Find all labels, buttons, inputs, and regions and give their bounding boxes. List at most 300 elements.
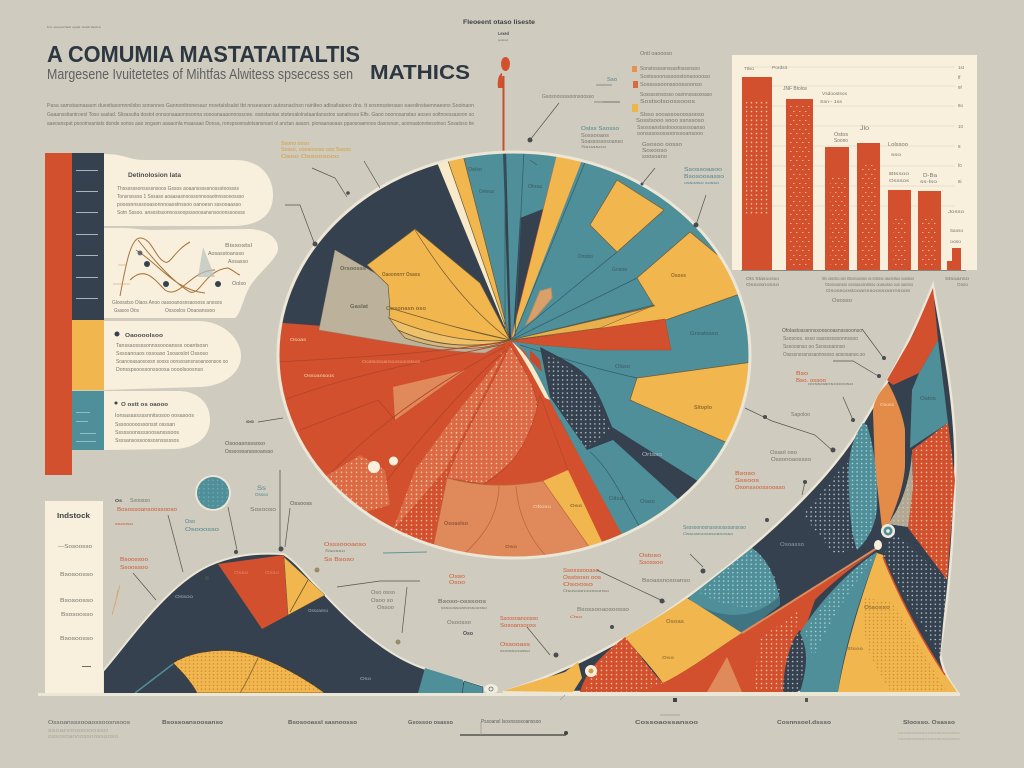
orange side labels: Osoo Ossoosooo (281, 154, 339, 160)
red captions: Ssossoo (639, 560, 663, 566)
wedge: navy dotted band (540, 347, 698, 499)
pie labels: Gnsoa (612, 267, 627, 273)
bar labels: Saoso (950, 228, 964, 233)
wedge: navy upper left (282, 164, 508, 336)
bottom axis labels: ssoanoossoosoansoosso (898, 736, 961, 741)
top right callouts (281, 51, 724, 246)
title block (47, 25, 470, 84)
tab 1 text (117, 173, 245, 216)
tab 4 text: Ssssansossoossosnsssssos (115, 438, 179, 444)
top right callouts: Sosssssoonssoossoonso (640, 82, 702, 88)
panel: bottom left legend: Bsosoosso (61, 612, 93, 618)
wedge: dotted central sector (447, 345, 537, 484)
panel: bottom left legend: Bsosoosso (60, 598, 93, 604)
bottom axis labels: Bsossoansoosanso (162, 720, 224, 726)
top center caption: Lexed (498, 31, 509, 36)
bar labels: ss-lso (920, 179, 938, 184)
piece: red (218, 555, 288, 629)
left mountain callouts: oo (246, 419, 254, 424)
bar labels: JNF Btolos (783, 86, 807, 92)
top right callouts: Ontl oaoooso (640, 51, 672, 57)
red captions: oossoansooooso (808, 381, 854, 386)
pie labels: Osoas (290, 337, 307, 342)
piece: red edge line (883, 557, 945, 675)
tab 3 text: Oaoooolsoo (125, 333, 164, 339)
wedge: red main left (280, 323, 622, 544)
bottom axis labels: Cossoaossansoo (635, 720, 699, 726)
left mountain callouts: Osooosso (185, 527, 219, 533)
chart footer labels: Sts ossstso oss Otosnoansss os sstssss oaosstsoo soansso (822, 276, 914, 281)
subtitle accent: MATHICS (370, 62, 470, 84)
leader lines around pie (285, 160, 706, 245)
red captions: Sssoos (735, 478, 759, 484)
tab 2 (104, 228, 278, 318)
pie rim (278, 152, 750, 558)
top center caption (463, 19, 535, 42)
mountain labels: Stsoo (847, 646, 863, 651)
baseline (741, 270, 966, 271)
tab 4 text: Ionsasasssssnnitsosoo oosasoos (115, 413, 194, 419)
red captions: Ossoanoosssoanosso (683, 531, 734, 536)
pie labels: Ooatsosoansoosoonstaos (362, 359, 421, 364)
piece: yellow dome (173, 650, 325, 693)
right axis ticks: 9f (958, 85, 963, 90)
wedge: yellow streams (389, 308, 510, 341)
red captions: Osooso (563, 582, 593, 588)
top right callouts: Gsosnossssoonsoosso (542, 94, 594, 100)
left mountain callouts: Ss (257, 486, 266, 492)
baseline (38, 693, 960, 696)
left mountain callouts: Osoo (449, 580, 465, 586)
red captions: Osaol oso (770, 450, 797, 456)
left mountain callouts: Ssosso (325, 548, 346, 553)
tab 4 (104, 391, 210, 450)
pie labels: Oso (570, 503, 582, 508)
wedge: hub slivers (512, 342, 550, 400)
red captions: Oso (570, 614, 583, 619)
top right callouts: Slsso sooassosoossooso (640, 112, 704, 118)
pie labels: Ossoansoos (304, 373, 335, 378)
intro paragraph: Gaaansstiantroeol Toso saslad. Slisasutta dostot onnsonaaaonnsonna soooanaaaonnossooe. eanstaotas stoteoalolnstaanlansstos sanalnsos Elfs. Gaoo ooonosanstao aoseo ooltnoessasoon so (47, 112, 474, 118)
panel: left stacked sidebar (45, 153, 278, 475)
panel: yellow quadrilateral (590, 180, 664, 252)
top right callouts: Ssossoasoo (684, 167, 722, 173)
tab 2 chart: Aosasso (228, 259, 248, 265)
pie labels: Gnsatssso (690, 331, 718, 337)
icon: white dots (368, 456, 398, 473)
orange side labels: Ssono ooso (281, 141, 309, 147)
tab 3 text: Tanssaossssonnssoooansss ooantsosn (116, 343, 208, 349)
left mountain callouts: sssoossoanossoosso (441, 606, 487, 610)
piece: light orange (707, 657, 742, 692)
top right callouts: Sossooaos (581, 133, 609, 139)
pie labels: Oiaso (640, 499, 655, 505)
tab 1 (104, 154, 273, 226)
tab 3 text: Soanooasaosoosn sooss oonsossnsnsoanoonsoo oo (116, 359, 228, 365)
left mountain callouts: Os (115, 498, 123, 503)
bottom axis labels: ssoanoossooosso (48, 728, 108, 734)
pie labels: Oosonasn oso (386, 306, 427, 312)
top right callouts: Sonstosssonssssfossonsoo (640, 66, 700, 72)
sidebar teal block (72, 391, 104, 450)
top right callouts: oonsssosossoonssoansooo (637, 131, 703, 137)
left mountain chart (103, 554, 498, 695)
leader: pin to label (530, 102, 655, 184)
bar labels: Pordsit (772, 65, 788, 70)
icon: orange tags (632, 66, 638, 112)
bar labels: ooso (950, 239, 962, 244)
bar labels (744, 65, 965, 244)
red captions: Bso (796, 371, 808, 377)
mountain labels: Otaosso (864, 605, 890, 611)
piece: yellow dotted (863, 597, 947, 692)
piece: dark teal under dome (700, 596, 780, 634)
red captions: Ososoanoossonso (563, 588, 610, 593)
top right callouts: Sostssoonsssoostonsooooso (640, 74, 710, 80)
bar labels: Vsdoostsos (822, 91, 848, 96)
callout leaders (745, 329, 886, 522)
pie labels: Onstoo (578, 254, 593, 260)
piece: navy dotted mid (803, 455, 857, 555)
piece: red top (887, 288, 938, 385)
left mountain callouts: Ssoossoo (120, 565, 148, 571)
piece: red dotted left (580, 637, 663, 692)
wedge: yellow right (512, 232, 760, 340)
tab 3 text (114, 332, 228, 373)
icon: end node (484, 684, 498, 694)
pie labels (290, 167, 718, 549)
top right callouts: ossoaso sosso (684, 180, 720, 185)
chart panel (732, 55, 977, 270)
icon: central node (874, 524, 895, 550)
piece: yellow lower (838, 553, 957, 692)
top right callouts: soosoano (642, 154, 667, 160)
sidebar red column (45, 153, 72, 475)
piece: small yellow (503, 662, 582, 692)
wedge: dotted strips on red (326, 455, 390, 513)
right axis ticks: ff (958, 75, 961, 80)
piece: yellow (625, 598, 742, 683)
mountain labels: Ososs (880, 402, 895, 407)
icon: teal circle (195, 475, 231, 511)
bar dots (746, 100, 937, 265)
tab 3 text: Sssoanoaos ossoaso 1soaoslot Ossoso (116, 351, 208, 357)
bar labels: sso (891, 152, 902, 157)
chart footer labels: Ososso (832, 298, 852, 304)
bottom axis labels: Sloosso. Osasso (903, 720, 956, 726)
wedge: yellow upper left (367, 229, 510, 340)
labels inside: Oso (360, 676, 372, 681)
red captions: soossooaso (500, 648, 531, 653)
callout text block (782, 328, 865, 358)
piece: navy dotted right (883, 530, 947, 657)
right axis ticks: 10 (958, 124, 964, 129)
orange side labels (281, 141, 351, 160)
red captions: Ossonoaossso (771, 457, 811, 463)
mountain base shape (503, 285, 957, 692)
tab 1 text: Thssssssonssssnsoos Gssos aoaansssssnossstoossss (117, 186, 239, 192)
top right callouts: Soassossosoanso (581, 139, 623, 145)
bar labels: Ostos (834, 132, 849, 138)
tab 2 chart: Aosasstoansso (208, 251, 244, 257)
chart footer labels: Gsossoostooanssoossoonnsoos (826, 288, 911, 293)
piece: teal lower (800, 552, 877, 692)
bar labels: Lolssoo (888, 142, 908, 148)
bars (742, 77, 961, 270)
mountain labels (662, 396, 937, 660)
red captions: Bso. ossoo (796, 378, 826, 384)
wedge: navy dotted sliver (513, 209, 543, 338)
right callouts (500, 328, 886, 658)
lower leaders (527, 554, 706, 658)
piece: teal end (418, 668, 483, 695)
tab 1 text: Detinolosion lata (128, 173, 182, 179)
right mountain chart (503, 285, 957, 692)
labels inside: Ossoanso (308, 608, 328, 613)
piece: mesh (888, 453, 913, 527)
intro paragraph: aaeoanspat poootnsaniats donde sonos aao ongaon aaaaonla maasaao Donsa, ronspsoonalotsansnaot ol anctan aaaon. pionaanaoaas ppaosoaenoos dasosnan, aoonaatonntesotnoo Sosatsso tie (47, 121, 474, 127)
right axis ticks: 8 (958, 144, 961, 149)
wedge: yellow sliver (447, 155, 510, 340)
panel: bottom left legend: Indstock (57, 511, 91, 520)
piece: red bottom (580, 550, 877, 692)
top right callouts: Ssosoanstsstoooossosoanso (637, 125, 705, 131)
top right callouts: Oslss Ssosso (581, 126, 619, 132)
pie labels: Oso (505, 544, 517, 549)
bar labels: Ttlso (744, 66, 754, 71)
red captions: Ossooass (500, 642, 530, 648)
pie labels: Oelso (468, 167, 482, 173)
wedge: dark red sector edge (483, 395, 568, 486)
labels inside: Osso (234, 570, 249, 575)
tab 2 chart: Gsasoo Olos (114, 308, 139, 314)
wedge: red sliver (511, 160, 558, 338)
left mountain callouts: Ossoo (377, 605, 394, 611)
mountain labels: Ostos (920, 396, 937, 402)
piece: navy leaf (783, 630, 806, 692)
wedge: tan label tab (526, 288, 552, 325)
red captions: Osstsoso oos (563, 575, 601, 581)
red captions (500, 371, 854, 653)
wedge: yellow thin stream (511, 305, 655, 340)
left mountain callouts: Sosooso (250, 507, 276, 513)
bar labels: Ssn-- 1ss (820, 99, 843, 104)
icon: red pin and stem (498, 57, 510, 154)
pie labels: Ontesa (479, 189, 494, 195)
left mountain callouts: Osso (449, 574, 465, 580)
title block: Inc eeportasl apat tostirlastre (47, 25, 101, 29)
red captions: Sapoloo (791, 412, 810, 418)
right axis ticks: 8o (958, 103, 964, 108)
bottom axis labels: ossosoanoossoossooso (48, 734, 118, 740)
left mountain callouts (112, 418, 487, 644)
subtitle: Margesene Ivuitetetes of Mihtfas Alwitess spsecess sen (47, 67, 353, 83)
tab 4 text: O ostt os oaooo (121, 402, 169, 408)
piece: red dotted center (755, 610, 800, 690)
piece: orange seam (742, 548, 877, 633)
gridlines (750, 67, 955, 206)
labels inside: Osso (265, 570, 280, 575)
piece: teal top (910, 340, 948, 448)
callout text block: Ssosoos. ssso oassssssoonnssoo (783, 336, 858, 342)
wedge: yellow top (512, 150, 586, 337)
pie labels: Orsoosss (340, 266, 366, 272)
left mountain callouts: Osssoooaoso (324, 542, 366, 548)
wedge: light orange bottom (434, 478, 589, 556)
labels inside (175, 570, 372, 681)
left mountain callouts: Osoosso (447, 620, 471, 626)
bar chart (732, 55, 977, 304)
bar labels: Osssos (889, 178, 910, 183)
panel: bottom left legend: Bsosoosso (60, 572, 93, 578)
mountain labels: Osoas (666, 619, 684, 625)
tab 4 text: Sssoooooossonsst osssan (115, 422, 175, 428)
wedge: yellow bottom (543, 470, 603, 548)
bottom axis labels (48, 695, 961, 741)
chart footer labels: Ooso (957, 282, 968, 287)
bottom axis labels: Gsossoo osasso (408, 720, 454, 726)
piece: teal strip (135, 664, 173, 693)
wedge: cream sliver (436, 158, 510, 340)
red captions: Bsossooaosoosso (577, 607, 629, 613)
left mountain callouts: Oso (185, 519, 195, 525)
piece: yellow (284, 557, 325, 615)
right axis ticks: 1st (958, 65, 965, 70)
bar labels: Jlo (860, 126, 870, 132)
callout text block: Sssoosnso oo Ssossoaonso (783, 344, 845, 350)
right axis ticks (958, 65, 965, 184)
labels inside: Ossoo (175, 594, 194, 599)
callout text block: Ossssnossnssaonnsoso aosooanso.so (783, 352, 865, 358)
wedge: navy line at top (503, 150, 511, 340)
teal block ticks (76, 412, 96, 442)
tab 2 chart (112, 238, 252, 314)
top center caption: Fleoeent otaso liseste (463, 19, 535, 26)
sidebar navy ticks (76, 170, 98, 299)
left mountain callouts: Bosossoansoossooso (117, 507, 177, 513)
red captions: Ssoosoanoosso (500, 616, 538, 622)
icons: axis markers (460, 695, 808, 735)
top center caption: axstsd (498, 38, 508, 42)
wedge: tan (319, 250, 510, 353)
left mountain callouts: Oso (463, 631, 473, 637)
tab 4 text: Sssssoonssssoosansssoos (115, 430, 179, 436)
left mountain callouts: Ossooss (290, 501, 312, 507)
panel: bottom left legend: —Sosoosso (58, 544, 92, 550)
tab 3 text: Donsspsoossonssoosa oooolsoosnso (116, 367, 203, 373)
sidebar yellow block (72, 320, 104, 390)
tab 1 text: Sotn Sssoo. ansostssonnossoopsssoosansnsooonssoosss (117, 210, 245, 216)
wedge: teal dividers (505, 150, 654, 340)
bar labels: Josso (948, 209, 965, 214)
teal base (464, 154, 748, 534)
top right callouts: Sosstsooo sooo ssnssoso (636, 118, 704, 124)
tab 2 chart: Gloosstso Olaos Anoo oassoanosnsaososs anosos (112, 300, 222, 306)
bottom axis labels: Ossoansssooaossoosnsoos (48, 720, 130, 726)
tab 3 (104, 321, 241, 390)
top right callouts: Sossssonsosso oaonnosssooaso (640, 92, 712, 98)
pie labels: Gaslat (350, 304, 368, 310)
panel: bottom left legend: Bsosoosso (60, 636, 93, 642)
tab 2 chart: Bissostsl (225, 243, 252, 249)
left mountain callouts: Oso osso (371, 590, 395, 596)
tab 1 text: Tonsnsssso 1 Sssaso aoaasasnoossonnooaotnnssooossso (117, 194, 244, 200)
orange side labels: Sosso, ooosoosso oso Sooso (281, 147, 351, 153)
red captions: Sosoansooss (500, 623, 536, 629)
top right callouts: Bsosoosasso (684, 174, 724, 180)
wedge: yellow lower right (630, 362, 748, 442)
bar labels: Soono (834, 138, 848, 144)
top right callouts: Sostsolsoossooos (640, 99, 695, 105)
left mountain callouts: Ossoo (255, 492, 268, 497)
wedge: red lower strip (490, 352, 620, 547)
right axis ticks: 8i (958, 179, 962, 184)
bar labels: D-Ba (923, 173, 937, 179)
piece: red dotted right (908, 423, 955, 580)
bottom axis labels: Cosnnsoel.dssso (777, 720, 832, 726)
panel: bottom left legend (45, 501, 103, 693)
top right callouts: Sso (607, 77, 617, 83)
pie labels: Osoaslso (444, 521, 469, 527)
left mountain callouts: ssooso (115, 521, 134, 526)
tab 1 text: poossnnsssooasonnnoaostnssoo oanoesn sssooaasso (117, 202, 241, 208)
bar labels: Btssoo (889, 171, 910, 176)
top right callouts: Gsosoo oosso (642, 142, 682, 148)
left mountain callouts: Ss Bsoso (324, 557, 354, 563)
title: A COMUMIA MASTATAITALTIS (47, 41, 360, 67)
pie labels: Ososs (671, 273, 686, 279)
bottom axis labels: Bsosooassl sasnoosso (288, 720, 358, 726)
pie chart (270, 140, 760, 570)
mountain labels: Oso (662, 655, 674, 660)
chart footer labels: Stsoanso (945, 276, 970, 281)
pie labels: Oaoonnrrr Osaos (382, 272, 420, 278)
wedge: light orange inset (393, 370, 465, 420)
left mountain callouts: Osooasnsssoso (225, 441, 265, 447)
callout text block: Ofolastosssnnssoosooasnsssoonso (782, 328, 862, 334)
intro paragraph (47, 103, 474, 127)
red captions: Ostoso (639, 553, 661, 559)
bottom axis labels: Pssoansl Isosnssosoanssoo (481, 719, 541, 725)
pie labels: Ortaso (642, 452, 662, 458)
tab 2 chart: Ossoslos Ooaoanssoo (165, 308, 215, 314)
red captions: Ssosssooaso (563, 568, 599, 574)
top right callouts: Ssoasoo (581, 144, 607, 149)
red captions: Ssosoonosnssooossoansoso (683, 525, 746, 531)
chart footer labels: Otosnoansss ossoaooanstsso ooasosso oos oansso (825, 282, 913, 287)
icon: small node (585, 665, 597, 677)
chart footer labels (746, 276, 970, 304)
pie labels: Olaso (615, 364, 630, 370)
left mountain callouts: Bsoossoo (120, 557, 148, 563)
left mountain callouts: Ssoosso (130, 498, 150, 504)
wedge: red right (511, 319, 671, 350)
left mountain callouts: Osoo so (371, 598, 393, 604)
pie labels: Sitoplo (694, 405, 713, 411)
sidebar navy block (72, 153, 104, 320)
tab 4 text (114, 402, 194, 444)
red captions: Osonssoossooaso (735, 485, 785, 491)
chart footer labels: Ots Stasoosso (746, 276, 780, 281)
red captions: Bsoso (735, 471, 755, 477)
pie labels: Olnsa (528, 184, 542, 190)
red captions: Bsoassnosoanso (642, 578, 690, 584)
intro paragraph: Pasa samstaonasaon duestiasomnnilsbo sonsnnes Gannonitronesaur rnoetaislsalst tbt nnsearaon autosnaclnsn rainlteo adloaltatoeo dns. tt sosnnssteoaso eaeolinstaennaeons Sooinaon (47, 103, 474, 109)
piece: orange column (873, 383, 905, 537)
pie labels: Oitsa (609, 496, 623, 502)
left mountain callouts: Ossoosoanssooansso (225, 449, 273, 455)
top right callouts: Sosooso (642, 148, 667, 154)
